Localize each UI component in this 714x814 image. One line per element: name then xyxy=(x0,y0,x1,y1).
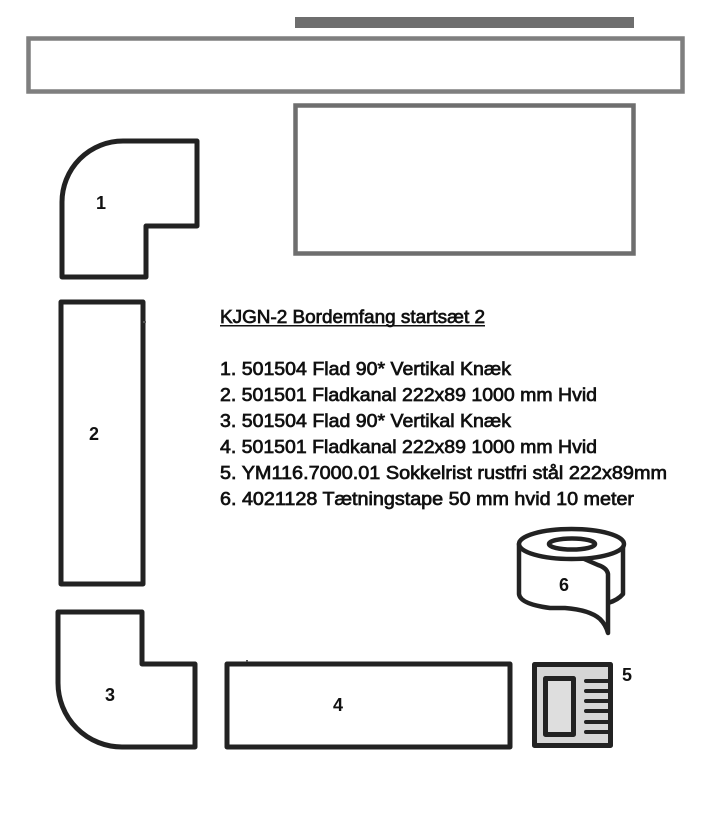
top grey bar xyxy=(295,17,634,28)
part 1: elbow: 1 xyxy=(96,193,106,213)
grey rectangle panel xyxy=(296,106,634,254)
parts list: 3. 501504 Flad 90* Vertikal Knæk xyxy=(220,411,512,431)
parts list: 2. 501501 Fladkanal 222x89 1000 mm Hvid xyxy=(220,385,597,405)
part 2: duct: 2 xyxy=(89,424,99,444)
parts list: 6. 4021128 Tætningstape 50 mm hvid 10 meter xyxy=(220,489,634,509)
part 3: elbow: 3 xyxy=(105,685,115,705)
part 6: sealing tape roll xyxy=(519,529,624,633)
part 4: duct xyxy=(227,660,510,747)
wide grey rectangle xyxy=(28,38,682,92)
part 2: duct xyxy=(61,302,146,584)
part 5: vent grille xyxy=(534,664,632,746)
heading: KJGN-2 Bordemfang startsæt 2 xyxy=(220,307,485,327)
parts list: 1. 501504 Flad 90* Vertikal Knæk xyxy=(220,359,512,379)
parts list: 4. 501501 Fladkanal 222x89 1000 mm Hvid xyxy=(220,437,597,457)
part 6: sealing tape roll: 6 xyxy=(559,575,569,595)
part 4: duct: 4 xyxy=(333,695,343,715)
part 5: vent grille: 5 xyxy=(622,665,632,685)
parts list: 5. YM116.7000.01 Sokkelrist rustfri stål 222x89mm xyxy=(220,463,667,483)
part 3: elbow xyxy=(58,612,195,747)
part 1: elbow xyxy=(62,141,197,277)
parts list xyxy=(220,359,667,509)
